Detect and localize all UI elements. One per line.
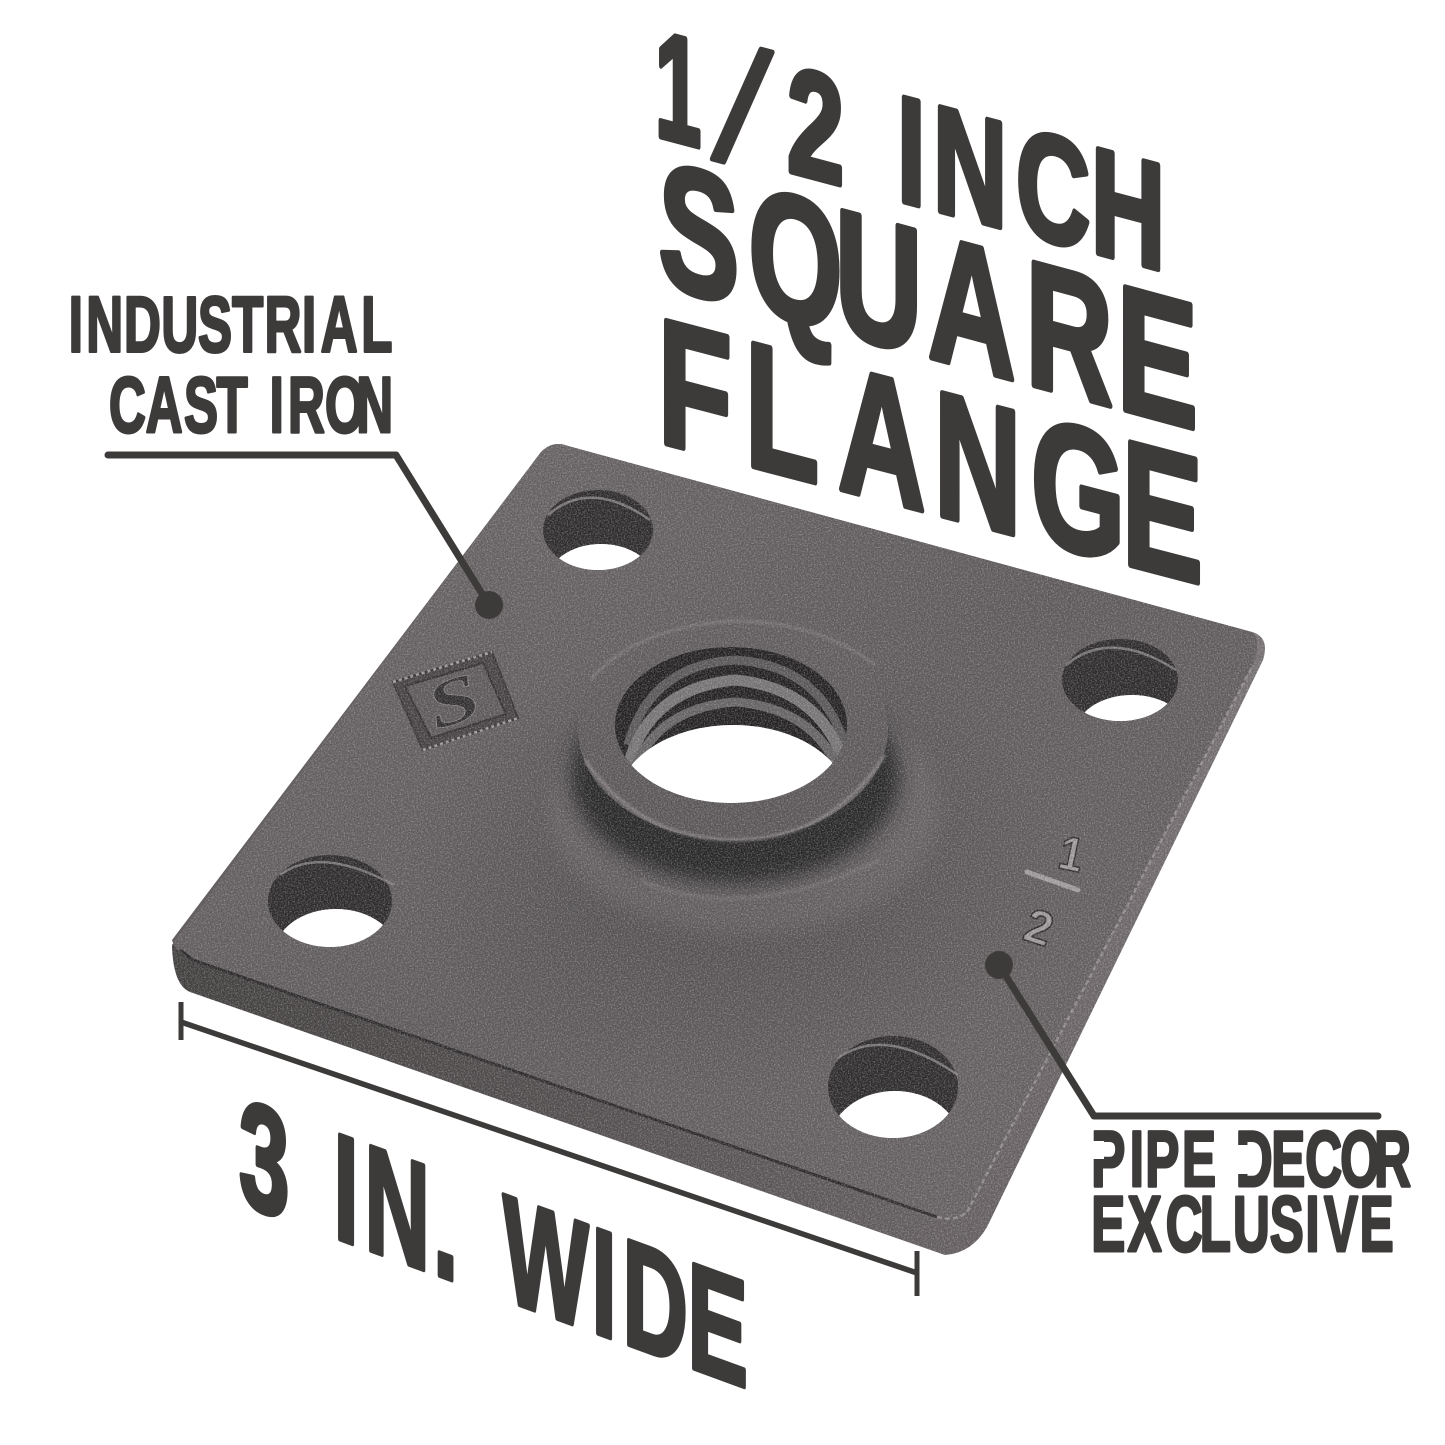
product: cast iron square flange — [160, 435, 1275, 1260]
callout text — [1091, 1116, 1411, 1269]
callout: pipe decor exclusive — [985, 951, 1411, 1269]
title line: 1/2 INCH — [655, 0, 1165, 303]
seam along the lower edge — [180, 950, 937, 1217]
title line: 1/2 INCH: 1 — [655, 0, 701, 180]
callout text: CAST IRON — [109, 362, 393, 450]
leader line and dot — [108, 455, 503, 619]
mounting hole: top left — [543, 490, 653, 570]
stamped 1/2 size mark: 2 — [1018, 899, 1060, 958]
flange side edge — [172, 444, 1265, 1255]
mounting hole: bottom left — [268, 855, 394, 947]
mounting hole: top right — [1062, 639, 1178, 721]
title line: 1/2 INCH: / — [702, 19, 781, 195]
callout: industrial cast iron — [69, 282, 503, 619]
title line: 1/2 INCH: 2 INCH — [787, 34, 1165, 303]
callout text: PIPE DECOR — [1091, 1116, 1411, 1204]
white bore and hole cutouts — [274, 544, 1190, 1193]
stamped S logo: S — [418, 659, 489, 744]
title: 1/2 inch square flange — [655, 0, 1203, 622]
callout text: EXCLUSIVE — [1091, 1181, 1394, 1269]
stamped 1/2 size mark — [1018, 825, 1089, 958]
leader line and dot — [985, 951, 1378, 1116]
mounting hole: bottom right — [828, 1036, 958, 1138]
callout text — [69, 282, 393, 450]
dimension label: 3 in. wide: 3 IN. WIDE — [239, 1065, 748, 1420]
title line: FLANGE: FLANGE — [658, 280, 1203, 622]
dimension line — [181, 1002, 917, 1296]
stamped S logo — [393, 652, 518, 750]
casting shadow on face — [172, 444, 1257, 1219]
surface grain — [160, 435, 1275, 1260]
callout text: INDUSTRIAL — [69, 282, 392, 369]
flange top face — [172, 444, 1257, 1219]
center boss with threaded bore — [550, 620, 940, 935]
stamped 1/2 size mark: 1 — [1054, 825, 1089, 883]
title line: SQUARE: SQUARE — [659, 123, 1198, 468]
